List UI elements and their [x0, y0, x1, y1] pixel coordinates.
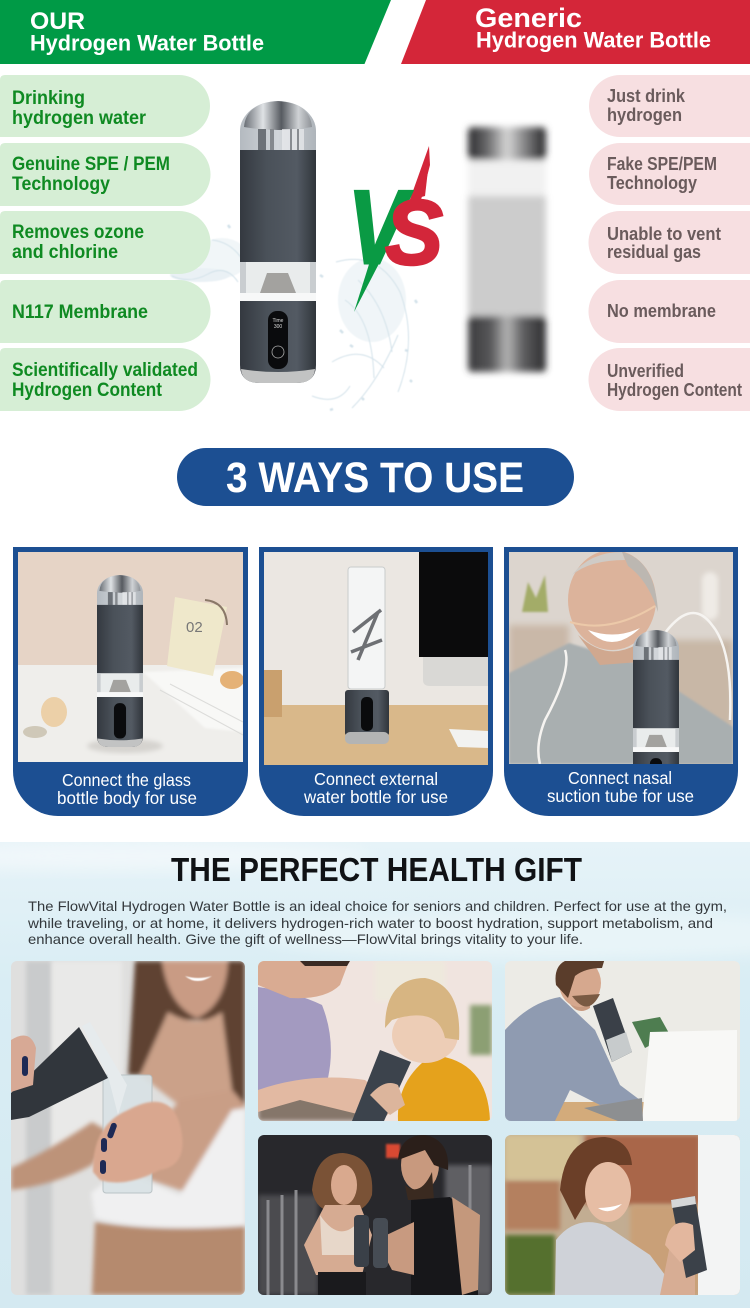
- header: generic bottle: Hydrogen Water Bottle: [476, 28, 711, 52]
- photo: mother and child: [258, 961, 492, 1121]
- generic text: residual gas: [607, 241, 701, 262]
- feature text: N117 Membrane: [12, 302, 148, 323]
- panel: our features: [0, 75, 211, 411]
- generic text: Just drink: [607, 85, 686, 106]
- our bottle image: [240, 101, 316, 383]
- photo: man at laptop: [505, 958, 740, 1121]
- S letter: S: [385, 182, 443, 284]
- generic pills: [589, 75, 750, 411]
- heading: 3 ways to use: 3 WAYS TO USE: [226, 454, 524, 502]
- heading: 3 ways to use: [177, 448, 574, 506]
- caption: [547, 768, 694, 806]
- card: external water bottle: [259, 547, 493, 816]
- lightning: [408, 146, 430, 205]
- photo: woman with bottle: [505, 1135, 740, 1295]
- photo: bottle on table: 02: [186, 619, 203, 636]
- generic text: Technology: [607, 172, 698, 193]
- generic text: Unable to vent: [607, 223, 721, 244]
- VS badge: [348, 146, 443, 312]
- feature text: Technology: [12, 174, 110, 195]
- feature pills: [0, 75, 211, 411]
- feature text: [12, 88, 198, 401]
- photo: man with nasal tube: [509, 552, 733, 764]
- generic text: Fake SPE/PEM: [607, 153, 717, 174]
- card: glass bottle: [13, 547, 248, 816]
- card: nasal suction tube: [504, 547, 738, 816]
- feature text: and chlorine: [12, 242, 118, 263]
- header: generic bottle: Generic: [475, 3, 582, 33]
- caption: [57, 770, 197, 808]
- text block: gift description: The FlowVital Hydrogen Water Bottle is an ideal choice for seniors and children. Perfect for use at the gym,: [28, 898, 727, 914]
- caption: Connect external: [314, 769, 438, 789]
- caption: suction tube for use: [547, 786, 694, 806]
- heading: the perfect health gift: THE PERFECT HEALTH GIFT: [171, 851, 582, 888]
- caption: Connect nasal: [568, 768, 672, 788]
- photo: bottle on desk: [264, 552, 488, 765]
- header: our bottle: [0, 0, 391, 64]
- our bottle image: Time: [273, 318, 284, 324]
- header: our bottle: OUR: [30, 8, 85, 35]
- V letter: V: [348, 170, 412, 286]
- feature text: Hydrogen Content: [12, 380, 163, 401]
- caption: water bottle for use: [303, 787, 448, 807]
- generic bottle image (blurred): [468, 127, 546, 372]
- feature text: Removes ozone: [12, 222, 144, 243]
- text block: gift description: enhance overall health. Give the gift of wellness—FlowVital brings vitality to your life.: [28, 931, 583, 947]
- generic text: [607, 85, 742, 400]
- header: our bottle: Hydrogen Water Bottle: [30, 30, 264, 56]
- feature text: hydrogen water: [12, 108, 147, 129]
- text block: gift description: while traveling, or at home, it delivers hydrogen-rich water to boost hydration, support metabolism, and: [27, 915, 713, 931]
- our bottle image: 300: [274, 324, 282, 330]
- feature text: Scientifically validated: [12, 360, 198, 381]
- caption: bottle body for use: [57, 788, 197, 808]
- header: generic bottle: [401, 0, 750, 64]
- generic text: No membrane: [607, 300, 716, 321]
- panel: generic features: [589, 75, 750, 411]
- generic text: Unverified: [607, 360, 684, 381]
- feature text: Drinking: [12, 88, 85, 109]
- photo: woman pouring water: [11, 961, 245, 1295]
- generic text: hydrogen: [607, 104, 682, 125]
- caption: [303, 769, 448, 807]
- panel: perfect health gift background: [0, 842, 750, 1308]
- photo: couple at gym: [258, 1135, 492, 1295]
- photo: bottle on table: [18, 552, 244, 762]
- feature text: Genuine SPE / PEM: [12, 154, 170, 175]
- caption: Connect the glass: [62, 770, 191, 790]
- water splash: [170, 225, 417, 410]
- text block: gift description: [27, 898, 727, 947]
